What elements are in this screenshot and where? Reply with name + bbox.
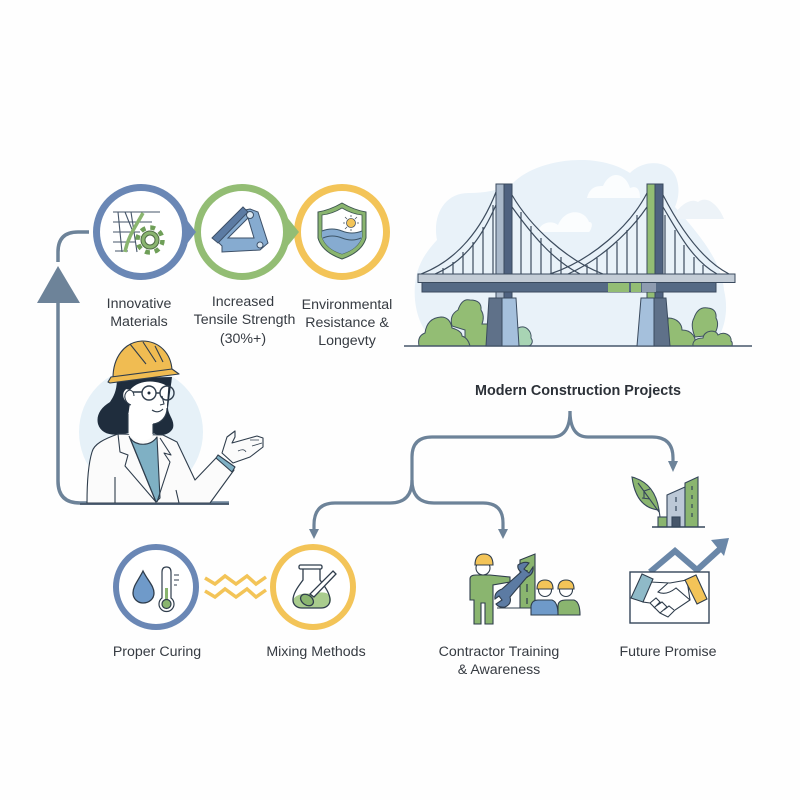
label: mixing methods: Mixing Methods [266, 644, 366, 660]
glasses [142, 386, 156, 400]
background: clouds [538, 175, 724, 232]
icon: growth arrow and handshake [630, 538, 729, 623]
helmet [113, 341, 172, 378]
circle: environmental resistance [298, 188, 386, 276]
hand [222, 431, 263, 463]
hair fringe [121, 378, 171, 390]
background: sky blob [415, 160, 726, 346]
shirt [130, 437, 160, 502]
label: innovative materials: Innovative [107, 296, 171, 312]
circle: tensile strength [198, 188, 286, 276]
arrow: blue wedge [180, 211, 196, 253]
illustration: suspension bridge [404, 160, 752, 346]
desk line [80, 503, 229, 505]
sleeve cuff [216, 455, 235, 472]
icon: materials mesh and gear [113, 212, 162, 252]
circle: mixing methods [273, 547, 353, 627]
hair [98, 377, 173, 435]
icon: water drop [133, 571, 154, 603]
icon: green buildings and leaf [632, 477, 705, 527]
circle: innovative materials [96, 188, 186, 276]
suspension cables [421, 192, 729, 274]
background: pale blue ellipse [79, 368, 203, 496]
icon: steel beam bracket [212, 207, 268, 252]
decorative: wavy link [205, 576, 266, 597]
label: future promise: Future Promise [620, 644, 717, 660]
arrow: branching connector [309, 411, 678, 539]
label: tensile strength: Tensile Strength [194, 312, 295, 328]
icon: contractor training team [470, 554, 580, 624]
text block: top circle labels [107, 294, 392, 349]
label: environmental resistance: Longevty [318, 333, 377, 349]
illustration: engineer presenting [79, 341, 263, 504]
label: innovative materials: Materials [110, 314, 168, 330]
bushes [419, 300, 732, 346]
label: tensile strength: (30%+) [220, 331, 266, 347]
panel: bottom left circles [116, 547, 353, 627]
ground line [404, 345, 752, 347]
arrow: green wedge [282, 211, 299, 253]
heading: modern construction projects: Modern Construction Projects [475, 383, 681, 399]
face and neck [123, 378, 169, 441]
label: contractor training: Contractor Training [439, 644, 559, 660]
arrow: feedback loop to innovative materials [37, 232, 229, 503]
label: tensile strength: Increased [212, 294, 274, 310]
icon: shield with sun and water [318, 203, 366, 259]
label: environmental resistance: Environmental [302, 297, 392, 313]
label: environmental resistance: Resistance & [305, 315, 389, 331]
panel: top process circles [96, 188, 386, 276]
label: proper curing: Proper Curing [113, 644, 201, 660]
left tower [486, 184, 519, 346]
bridge deck [418, 274, 735, 292]
text block: bottom left labels [113, 644, 366, 660]
coat [87, 434, 234, 503]
icon: flask and spoon [293, 565, 336, 608]
label: contractor training: & Awareness [458, 662, 540, 678]
icon: thermometer [159, 567, 179, 612]
lapels [115, 434, 179, 503]
right tower [637, 184, 670, 346]
circle: proper curing [116, 547, 196, 627]
